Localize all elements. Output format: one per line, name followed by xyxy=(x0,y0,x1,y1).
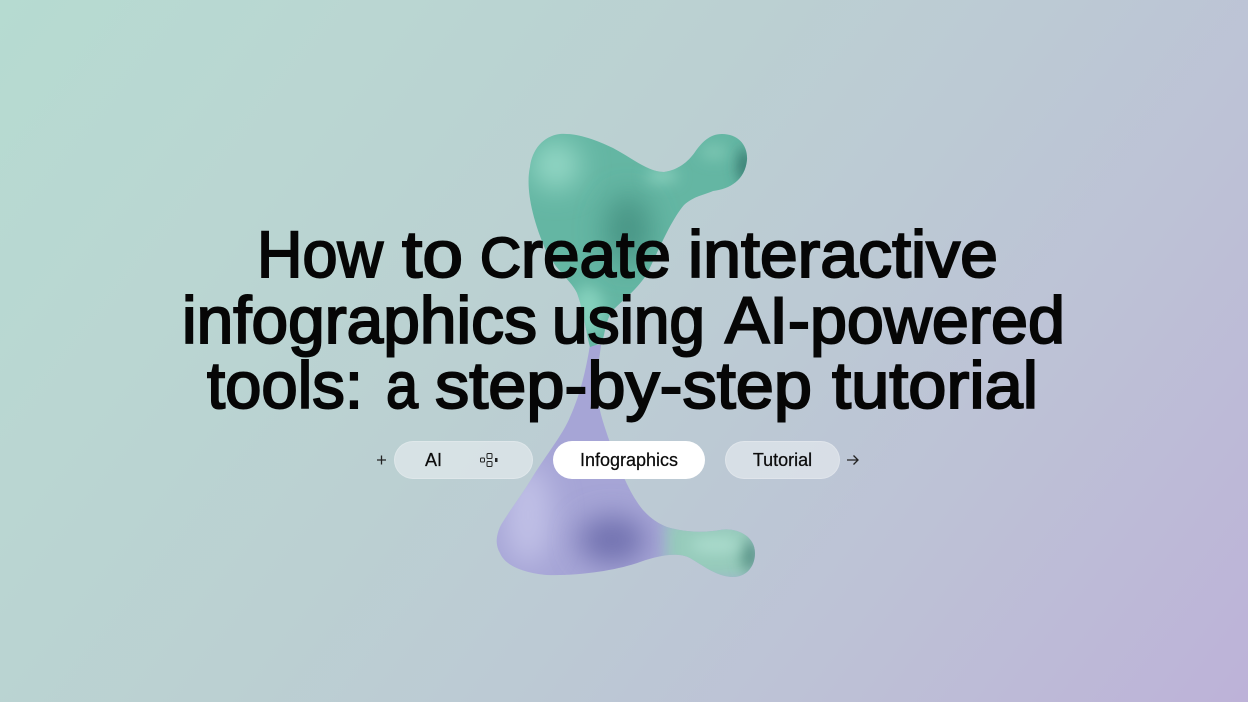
icon: plus xyxy=(377,456,386,464)
title: AI-powered xyxy=(725,283,1065,357)
icon: purple lower blob xyxy=(490,345,760,580)
title: infographics xyxy=(182,283,537,357)
title: using xyxy=(552,283,705,357)
background and 3D blobs xyxy=(185,134,1062,577)
title: tutorial xyxy=(832,348,1038,422)
title: to xyxy=(402,217,463,291)
title: How xyxy=(257,217,383,291)
icon: teal upper blob xyxy=(525,130,752,350)
tag: Tutorial xyxy=(725,441,840,479)
label: AI: AI xyxy=(425,450,442,470)
title: a xyxy=(386,348,418,422)
title: interactive xyxy=(688,217,998,291)
tag: AI xyxy=(394,441,533,479)
tag: Infographics: Infographics xyxy=(580,450,678,470)
title: step-by-step xyxy=(435,348,812,422)
title xyxy=(182,217,1065,422)
icon: arrow xyxy=(847,456,858,464)
tag: Infographics xyxy=(553,441,705,479)
title: Create xyxy=(480,217,671,291)
title: tools: xyxy=(207,348,363,422)
icon: nodes xyxy=(480,453,498,467)
tag: Tutorial: Tutorial xyxy=(753,450,812,470)
